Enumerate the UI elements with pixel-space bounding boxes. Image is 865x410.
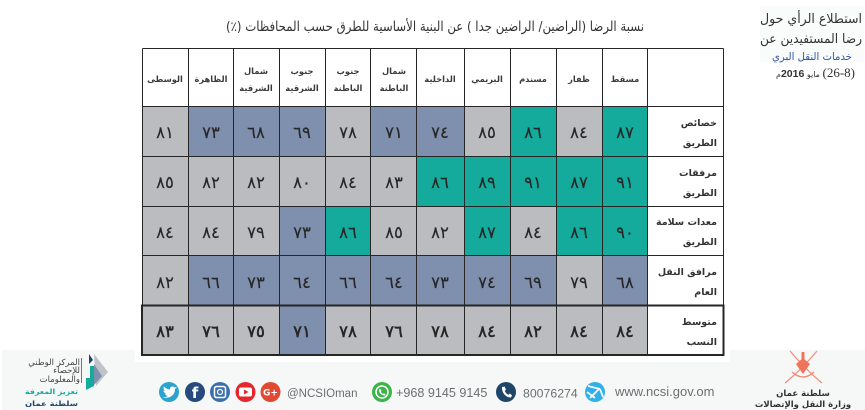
phone number: 80076274 bbox=[523, 386, 578, 400]
column headers: جنوب bbox=[337, 66, 359, 77]
row headers: العام bbox=[694, 287, 717, 298]
values row 2: ٨٥ bbox=[156, 173, 174, 192]
values row 1: ٦٩ bbox=[293, 123, 311, 142]
values row 2: ٨٦ bbox=[431, 173, 449, 192]
row headers: الطريق bbox=[683, 188, 717, 199]
values row 3: ٩٠ bbox=[616, 223, 634, 242]
values row 4: ٦٨ bbox=[616, 273, 634, 292]
NCSI logo: المركز الوطني bbox=[28, 358, 80, 368]
survey heading: خدمات النقل البري bbox=[772, 51, 852, 63]
values row 4: ٧٣ bbox=[431, 273, 449, 292]
footer background bbox=[2, 350, 865, 410]
summary row frame bbox=[142, 306, 724, 355]
values row 1: ٧١ bbox=[385, 123, 403, 142]
values row 1: ٧٤ bbox=[431, 123, 449, 142]
icon: globe bbox=[585, 382, 605, 402]
values row 3: ٨٦ bbox=[570, 223, 588, 242]
values row 1: ٧٣ bbox=[202, 123, 220, 142]
values summary row: ٨٤ bbox=[570, 322, 588, 341]
column headers: الشرقية bbox=[285, 83, 319, 94]
row headers: النسب bbox=[687, 337, 717, 348]
row headers: متوسط bbox=[682, 317, 717, 328]
column headers: ظفار bbox=[567, 74, 590, 85]
row headers: الطريق bbox=[683, 138, 717, 149]
values row 2: ٨٩ bbox=[478, 173, 496, 192]
values row 2: ٩١ bbox=[616, 173, 634, 192]
values row 2: ٨٢ bbox=[202, 173, 220, 192]
values row 3: ٧٩ bbox=[247, 223, 265, 242]
row headers: معدات سلامة bbox=[656, 217, 717, 228]
values row 4: ٦٤ bbox=[293, 273, 311, 292]
values row 2: ٨٠ bbox=[293, 173, 311, 192]
values row 3: ٨٧ bbox=[478, 223, 496, 242]
values row 3: ٨٦ bbox=[339, 223, 357, 242]
survey heading: (26-8) مايو 2016م bbox=[776, 65, 855, 80]
values row 4 bbox=[156, 273, 634, 292]
NCSI logo: تعزيز المعرفة bbox=[25, 388, 78, 396]
row headers: مرفقات bbox=[679, 168, 717, 179]
column headers: جنوب bbox=[291, 66, 313, 77]
values row 3: ٨٥ bbox=[385, 223, 403, 242]
survey heading: استطلاع الرأي حول bbox=[760, 10, 862, 27]
values summary row: ٧٨ bbox=[431, 322, 449, 341]
column headers: الوسطى bbox=[147, 74, 183, 85]
column headers: الشرقية bbox=[239, 83, 273, 94]
ministry logo bbox=[755, 351, 851, 410]
values row 1: ٦٨ bbox=[247, 123, 265, 142]
values row 3: ٨٤ bbox=[156, 223, 174, 242]
values row 3: ٨٢ bbox=[431, 223, 449, 242]
grid lines bbox=[142, 48, 724, 355]
column headers: الباطنة bbox=[334, 83, 362, 93]
values row 3: ٨٤ bbox=[524, 223, 542, 242]
values row 4: ٦٦ bbox=[202, 273, 220, 292]
values row 2: ٨٣ bbox=[385, 173, 403, 192]
icon: twitter bbox=[159, 382, 179, 402]
values summary row: ٧٦ bbox=[202, 322, 220, 341]
values row 4: ٧٣ bbox=[247, 273, 265, 292]
row headers: مرافق النقل bbox=[658, 267, 717, 278]
values row 1: ٨٥ bbox=[478, 123, 496, 142]
row headers bbox=[656, 118, 717, 348]
data table bbox=[142, 48, 724, 355]
values row 2: ٨٧ bbox=[570, 173, 588, 192]
row headers: خصائص bbox=[681, 118, 717, 129]
cell backgrounds bbox=[142, 106, 648, 355]
survey heading bbox=[760, 6, 864, 80]
values summary row: ٧٨ bbox=[339, 322, 357, 341]
column headers: الظاهرة bbox=[195, 74, 228, 85]
social handle: @NCSIOman bbox=[287, 388, 357, 400]
values row 4: ٧٤ bbox=[478, 273, 496, 292]
values row 4: ٦٩ bbox=[524, 273, 542, 292]
values row 2: ٨٤ bbox=[339, 173, 357, 192]
values row 4: ٨٢ bbox=[156, 273, 174, 292]
values summary row: ٧١ bbox=[293, 322, 311, 341]
values summary row: ٨٤ bbox=[478, 322, 496, 341]
column headers: مسندم bbox=[519, 74, 547, 85]
values summary row: ٨٣ bbox=[156, 322, 174, 341]
values row 2: ٩١ bbox=[524, 173, 542, 192]
values row 4: ٧٩ bbox=[570, 273, 588, 292]
values summary row: ٧٦ bbox=[385, 322, 403, 341]
icon: google plus: G+ bbox=[263, 388, 278, 398]
values row 3: ٨٤ bbox=[202, 223, 220, 242]
NCSI logo: للإحصاء bbox=[53, 366, 80, 376]
icon: instagram bbox=[210, 382, 230, 402]
column headers: الداخلية bbox=[424, 74, 456, 84]
column headers: البريمي bbox=[471, 74, 503, 85]
title: نسبة الرضا (الراضين/ الراضين جدا ) عن البنية الأساسية للطرق حسب المحافظات (٪) bbox=[226, 18, 644, 35]
values row 1 bbox=[156, 123, 634, 142]
values row 4: ٦٤ bbox=[385, 273, 403, 292]
website: www.ncsi.gov.om bbox=[614, 384, 714, 399]
values summary row: ٨٢ bbox=[524, 322, 542, 341]
values summary row: ٨٤ bbox=[616, 322, 634, 341]
column headers: الباطنة bbox=[380, 83, 408, 93]
icon: youtube bbox=[236, 382, 256, 402]
icon: google plus bbox=[260, 382, 280, 402]
values row 4: ٦٦ bbox=[339, 273, 357, 292]
column headers: شمال bbox=[382, 66, 406, 76]
icon: whatsapp bbox=[372, 382, 392, 402]
column headers: مسقط bbox=[611, 74, 639, 84]
NCSI logo: والمعلومات bbox=[40, 375, 80, 385]
values row 1: ٨٤ bbox=[570, 123, 588, 142]
icon: facebook: f bbox=[192, 384, 199, 402]
row headers: الطريق bbox=[683, 237, 717, 248]
values row 1: ٨٦ bbox=[524, 123, 542, 142]
NCSI logo bbox=[25, 354, 108, 408]
icon: phone bbox=[496, 382, 516, 402]
NCSI logo: سلطنة عمان bbox=[25, 400, 78, 408]
values row 1: ٧٨ bbox=[339, 123, 357, 142]
ministry logo: سلطنة عمان bbox=[776, 389, 830, 399]
values summary row bbox=[156, 322, 634, 341]
column headers: شمال bbox=[244, 66, 268, 76]
column headers bbox=[147, 66, 639, 94]
ministry logo: وزارة النقل والإتصالات bbox=[755, 400, 851, 410]
values summary row: ٧٥ bbox=[247, 322, 265, 341]
values row 2 bbox=[156, 173, 634, 192]
values row 1: ٨٧ bbox=[616, 123, 634, 142]
icon: facebook bbox=[185, 382, 205, 402]
values row 3 bbox=[156, 223, 634, 242]
values row 3: ٧٣ bbox=[293, 223, 311, 242]
values row 2: ٨٢ bbox=[247, 173, 265, 192]
whatsapp number: +968 9145 9145 bbox=[396, 386, 487, 400]
values row 1: ٨١ bbox=[156, 123, 174, 142]
